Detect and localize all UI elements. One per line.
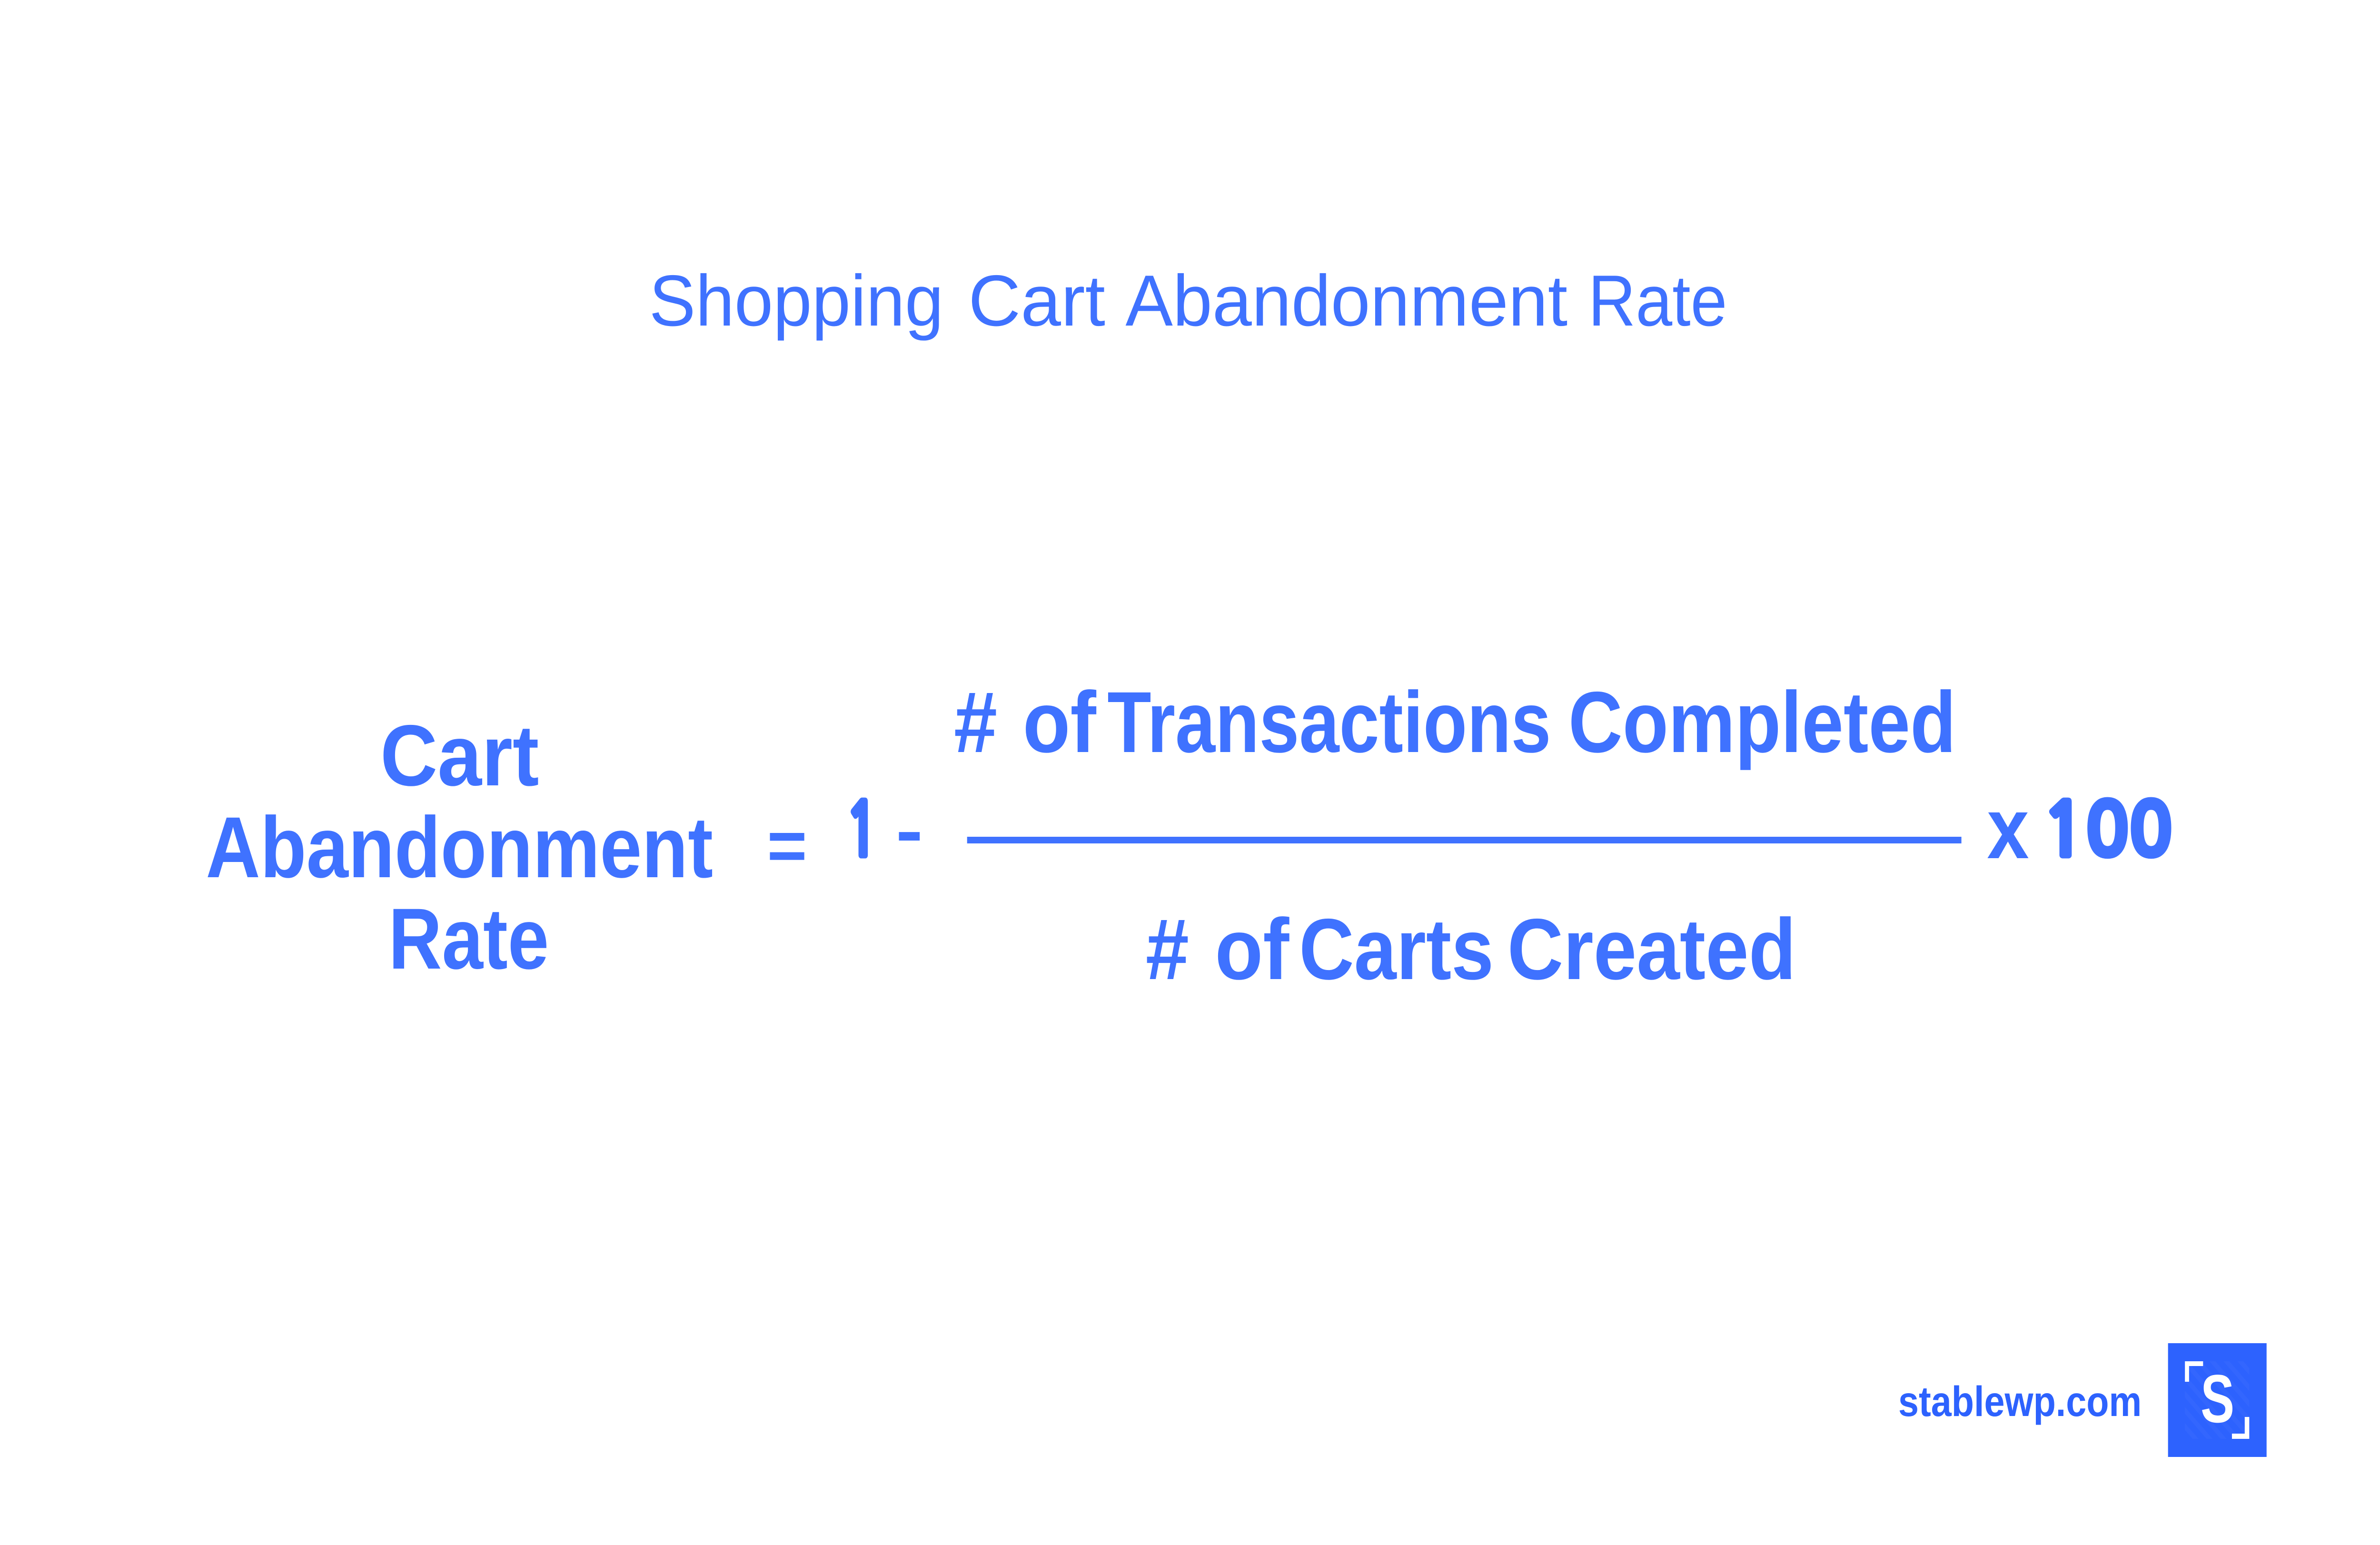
equals sign: = [767,805,807,885]
numerator: # of Transactions Completed [954,674,1956,771]
numerator: # of Transactions Completed: Transactions [1107,674,1551,771]
brand name: stablewp.com: stablewp.com [1898,1378,2142,1425]
numerator: # of Transactions Completed: Completed [1568,674,1956,771]
denominator: # of Carts Created [1146,901,1796,998]
formula left-hand term: Cart Abandonment Rate [206,707,713,988]
title: Rate [1588,260,1727,341]
multiplier: x 100 [1987,780,2172,877]
title: Abandonment [1125,260,1567,341]
multiplier: x 100: 100 [2042,794,2172,867]
minus sign: - [896,790,923,870]
fraction bar [967,837,1962,843]
formula left-hand term: Cart Abandonment Rate: Abandonment [206,799,713,896]
multiplier: x 100: x [1987,780,2029,877]
formula left-hand term: Cart Abandonment Rate: Rate [388,891,549,988]
denominator: # of Carts Created: of [1215,901,1290,998]
denominator: # of Carts Created: # [1146,901,1189,998]
title: Shopping [649,260,943,341]
icon: stablewp logo: S [2201,1361,2234,1437]
numerator: # of Transactions Completed: of [1023,674,1097,771]
numerator: # of Transactions Completed: # [954,674,997,771]
title: Cart [968,260,1105,341]
denominator: # of Carts Created: Carts [1299,901,1494,998]
one: 1 [845,794,878,867]
title [649,260,1727,341]
icon: stablewp logo [2168,1343,2267,1457]
denominator: # of Carts Created: Created [1507,901,1796,998]
formula left-hand term: Cart Abandonment Rate: Cart [380,707,539,804]
